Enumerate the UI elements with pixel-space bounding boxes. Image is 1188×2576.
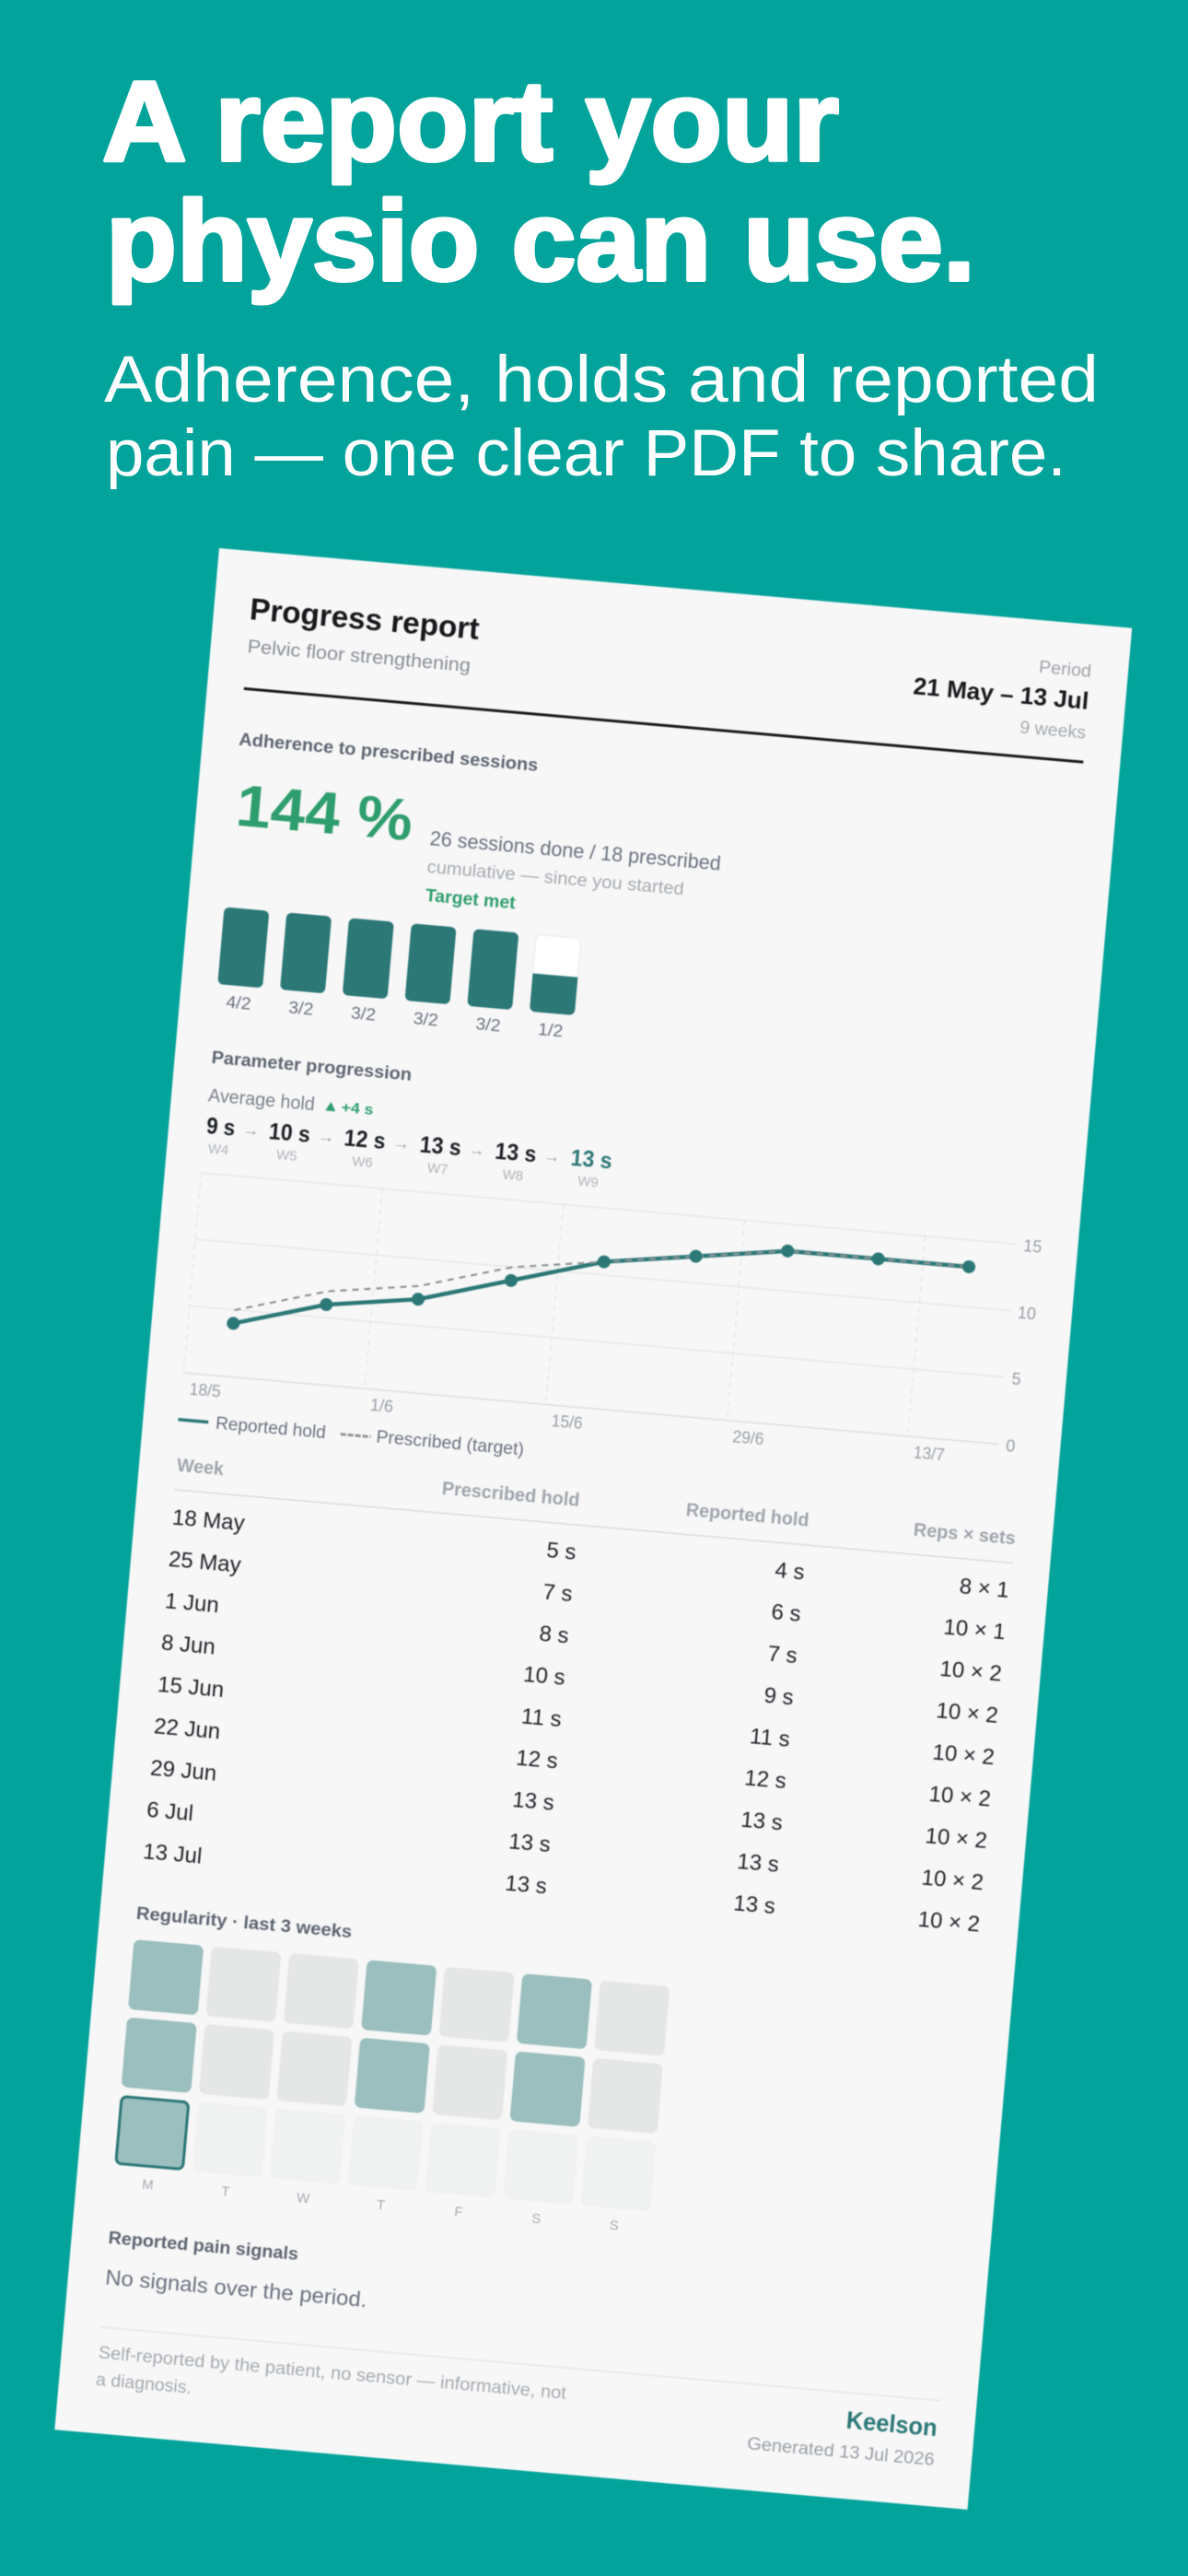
column: prescribed hold: 13 s bbox=[504, 1871, 548, 1899]
column: week: 8 Jun bbox=[160, 1631, 216, 1660]
hold progression sequence: W8 bbox=[502, 1166, 524, 1184]
column: reported hold bbox=[732, 1557, 806, 1919]
average hold label bbox=[207, 1085, 375, 1120]
disclaimer bbox=[95, 2344, 567, 2430]
weekly session bars: 3/2 bbox=[350, 1003, 377, 1025]
title: physio can use. bbox=[106, 179, 975, 305]
weekly session bars: 3/2 bbox=[287, 999, 314, 1019]
adherence detail: 26 sessions done / 18 prescribed bbox=[429, 826, 722, 875]
hold progression sequence: W4 bbox=[207, 1141, 229, 1158]
column: prescribed hold: 11 s bbox=[520, 1704, 563, 1732]
column: week: 18 May bbox=[171, 1505, 246, 1536]
weekly session bars: 1/2 bbox=[537, 1020, 564, 1040]
column: reported hold: 4 s bbox=[774, 1558, 806, 1586]
subtitle bbox=[104, 344, 1099, 490]
brand and generated date bbox=[746, 2397, 938, 2470]
column: reps by sets bbox=[917, 1573, 1010, 1938]
chart legend bbox=[177, 1411, 525, 1460]
line chart: hold over time: 10 bbox=[1017, 1304, 1037, 1323]
adherence detail bbox=[424, 826, 722, 931]
column: reported hold: 11 s bbox=[749, 1724, 791, 1752]
weekly session bars: 4/2 bbox=[226, 993, 251, 1013]
table header: Reps × sets bbox=[913, 1520, 1017, 1549]
column: week: 1 Jun bbox=[164, 1588, 220, 1618]
column: reported hold: 12 s bbox=[743, 1765, 787, 1794]
column: reps by sets: 10 × 2 bbox=[917, 1907, 981, 1938]
hold progression sequence: → bbox=[392, 1133, 411, 1153]
average hold label: +4 s bbox=[341, 1100, 374, 1118]
column: reps by sets: 10 × 2 bbox=[938, 1657, 1003, 1687]
hold progression sequence: W6 bbox=[352, 1153, 373, 1171]
adherence percentage: 144 % bbox=[234, 772, 415, 853]
reported pain signals: Reported pain signals bbox=[108, 2229, 299, 2265]
disclaimer: Self-reported by the patient, no sensor — informative, not bbox=[98, 2344, 567, 2404]
column: prescribed hold: 13 s bbox=[511, 1787, 555, 1816]
hold progression sequence: 13 s bbox=[570, 1145, 613, 1175]
line chart: hold over time: 29/6 bbox=[732, 1427, 764, 1448]
period block bbox=[910, 647, 1092, 744]
chart legend: Reported hold bbox=[215, 1414, 327, 1443]
average hold label: Average hold bbox=[207, 1085, 316, 1115]
period block: Period bbox=[1038, 658, 1092, 682]
regularity calendar grid: S bbox=[531, 2211, 542, 2227]
hold progression sequence: W9 bbox=[577, 1174, 600, 1190]
regularity calendar grid: S bbox=[609, 2218, 619, 2234]
report header: Progress report bbox=[249, 591, 481, 646]
reported pain signals: No signals over the period. bbox=[104, 2265, 368, 2312]
regularity calendar grid bbox=[112, 1939, 670, 2237]
regularity calendar grid: F bbox=[454, 2204, 463, 2220]
panel: progress report card bbox=[54, 548, 1132, 2510]
column: week: 25 May bbox=[168, 1547, 242, 1578]
column: week: 29 Jun bbox=[149, 1756, 217, 1786]
column: reps by sets: 10 × 1 bbox=[942, 1615, 1007, 1645]
column: prescribed hold: 8 s bbox=[538, 1622, 570, 1649]
hold progression sequence: → bbox=[242, 1120, 260, 1140]
report header: Pelvic floor strengthening bbox=[247, 637, 472, 676]
line chart: hold over time bbox=[181, 1165, 1042, 1471]
weekly session bars: 3/2 bbox=[475, 1014, 501, 1036]
column: week: 13 Jul bbox=[142, 1839, 203, 1869]
table header bbox=[176, 1456, 1017, 1549]
hold progression sequence: 10 s bbox=[268, 1118, 311, 1148]
weekly session bars bbox=[215, 907, 581, 1041]
hold progression sequence bbox=[204, 1113, 613, 1192]
table header: Reported hold bbox=[685, 1500, 809, 1531]
adherence detail: cumulative — since you started bbox=[426, 858, 685, 899]
column: reported hold: 13 s bbox=[740, 1808, 784, 1836]
line chart: hold over time: 1/6 bbox=[369, 1396, 394, 1416]
line chart: hold over time: 15 bbox=[1022, 1236, 1042, 1257]
heading: parameter progression: Parameter progression bbox=[211, 1048, 413, 1085]
hold progression sequence: → bbox=[543, 1146, 561, 1166]
weekly data table bbox=[141, 1456, 1017, 1938]
disclaimer: a diagnosis. bbox=[95, 2371, 192, 2398]
brand and generated date: Keelson bbox=[845, 2406, 938, 2441]
column: reps by sets: 10 × 2 bbox=[927, 1782, 992, 1812]
column: reported hold: 9 s bbox=[763, 1683, 795, 1711]
regularity calendar grid: T bbox=[376, 2197, 386, 2214]
today cell bbox=[116, 2096, 189, 2170]
line chart: hold over time: 18/5 bbox=[189, 1380, 222, 1401]
hold progression sequence: → bbox=[317, 1127, 335, 1146]
column: reported hold: 6 s bbox=[770, 1599, 802, 1627]
subtitle: Adherence, holds and reported bbox=[104, 344, 1099, 416]
weekly session bars: 3/2 bbox=[413, 1009, 439, 1030]
brand and generated date: Generated 13 Jul 2026 bbox=[746, 2434, 935, 2470]
column: reps by sets: 10 × 2 bbox=[935, 1698, 999, 1728]
line chart: hold over time: 5 bbox=[1011, 1369, 1022, 1388]
line chart: hold over time: 13/7 bbox=[913, 1443, 946, 1464]
column: reps by sets: 8 × 1 bbox=[959, 1574, 1010, 1603]
hold progression sequence: → bbox=[468, 1140, 486, 1160]
column: week: 15 Jun bbox=[157, 1672, 225, 1703]
period block: 9 weeks bbox=[1019, 719, 1087, 744]
column: week: 22 Jun bbox=[153, 1714, 221, 1744]
column: prescribed hold: 13 s bbox=[507, 1829, 552, 1857]
heading: regularity: Regularity · last 3 weeks bbox=[135, 1904, 353, 1942]
column: reps by sets: 10 × 2 bbox=[925, 1823, 988, 1854]
column: prescribed hold: 5 s bbox=[545, 1538, 577, 1565]
title bbox=[102, 59, 975, 305]
hold progression sequence: 13 s bbox=[419, 1132, 462, 1161]
chart legend: Prescribed (target) bbox=[376, 1428, 525, 1460]
column: week bbox=[142, 1505, 246, 1870]
column: reps by sets: 10 × 2 bbox=[931, 1740, 996, 1770]
column: prescribed hold bbox=[504, 1537, 577, 1899]
report header bbox=[246, 591, 481, 677]
heading: adherence: Adherence to prescribed sessions bbox=[239, 731, 539, 776]
regularity calendar grid: M bbox=[141, 2176, 154, 2194]
column: prescribed hold: 12 s bbox=[515, 1746, 559, 1774]
column: reported hold: 7 s bbox=[766, 1642, 798, 1669]
hold progression sequence: 9 s bbox=[205, 1113, 236, 1142]
column: prescribed hold: 10 s bbox=[522, 1662, 566, 1691]
regularity calendar grid: T bbox=[220, 2184, 230, 2200]
column: week: 6 Jul bbox=[146, 1797, 194, 1826]
column: reported hold: 13 s bbox=[732, 1891, 776, 1919]
column: reported hold: 13 s bbox=[736, 1849, 780, 1878]
period block: 21 May – 13 Jul bbox=[913, 672, 1089, 715]
column: reps by sets: 10 × 2 bbox=[921, 1866, 984, 1895]
column: prescribed hold: 7 s bbox=[542, 1580, 574, 1607]
hold progression sequence: W7 bbox=[426, 1160, 448, 1177]
subtitle: pain — one clear PDF to share. bbox=[106, 417, 1066, 490]
adherence detail: Target met bbox=[425, 886, 517, 914]
hold progression sequence: W5 bbox=[275, 1147, 297, 1165]
line chart: hold over time: 0 bbox=[1005, 1436, 1016, 1456]
table header: Week bbox=[176, 1456, 226, 1480]
regularity calendar grid: W bbox=[296, 2190, 311, 2207]
reported pain signals bbox=[104, 2229, 371, 2312]
hold progression sequence: 13 s bbox=[494, 1139, 538, 1167]
title: A report your bbox=[102, 59, 839, 185]
table header: Prescribed hold bbox=[441, 1479, 580, 1511]
line chart: hold over time: 15/6 bbox=[551, 1411, 584, 1433]
hold progression sequence: 12 s bbox=[343, 1125, 387, 1154]
